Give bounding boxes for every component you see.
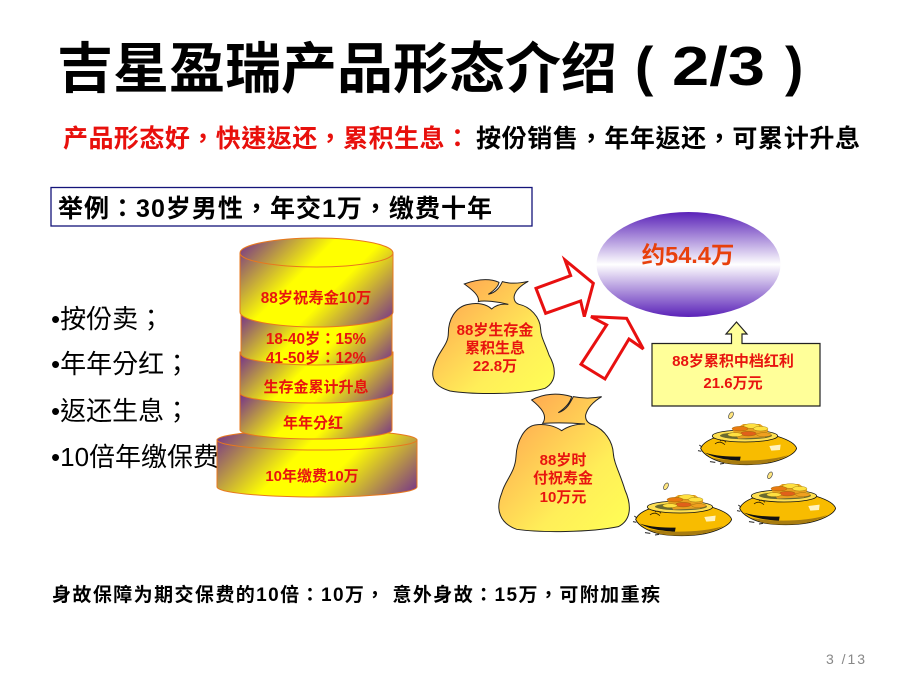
icon: gold pots (633, 411, 836, 536)
title: ) (785, 35, 803, 97)
arrow: upper red (536, 260, 593, 317)
bag: birthday benefit: 10万元 (540, 489, 586, 506)
dividend layer (240, 393, 392, 439)
rate layer: 41-50岁：12% (266, 349, 367, 367)
stacked cylinder chart (217, 238, 417, 497)
bullet list: •返还生息； (51, 396, 190, 426)
title: 吉星盈瑞产品形态介绍 (57, 38, 617, 100)
footnote: 身故保障为期交保费的10倍：10万， 意外身故：15万，可附加重疾 (52, 583, 660, 606)
example box (51, 188, 532, 226)
bullet list: •按份卖； (51, 304, 164, 334)
title: ( (635, 35, 654, 97)
cumulative interest layer (240, 352, 393, 403)
subtitle: 产品形态好，快速返还，累积生息： (63, 125, 470, 153)
dividend layer: 年年分红 (283, 414, 343, 432)
bag: survival benefit: 88岁生存金 (457, 321, 533, 339)
page number: 3 /13 (826, 651, 865, 667)
bag: survival benefit: 累积生息 (465, 339, 525, 357)
subtitle: 按份销售，年年返还，可累计升息 (476, 125, 860, 153)
base layer (217, 430, 417, 497)
bag: birthday benefit: 付祝寿金 (533, 469, 593, 487)
total oval: 约54.4万 (642, 242, 734, 268)
top layer (240, 238, 393, 327)
top layer: 88岁祝寿金10万 (261, 289, 371, 307)
bullet list: •10倍年缴保费 (51, 442, 219, 472)
rate layer (241, 312, 392, 367)
callout: accumulated dividend: 88岁累积中档红利 (672, 352, 794, 370)
example box: 举例：30岁男性，年交1万，缴费十年 (58, 195, 492, 223)
base layer: 10年缴费10万 (265, 467, 359, 485)
rate layer: 18-40岁：15% (266, 330, 367, 348)
bag: birthday benefit (499, 394, 629, 532)
total oval (596, 212, 780, 317)
subtitle (63, 125, 860, 153)
bullet list (51, 304, 219, 472)
callout: accumulated dividend (652, 322, 820, 406)
arrow: lower red (581, 317, 643, 379)
bullet list: •年年分红； (51, 349, 190, 379)
title: 2/3 (672, 35, 765, 97)
bag: birthday benefit: 88岁时 (540, 451, 586, 469)
bag: survival benefit: 22.8万 (473, 358, 517, 375)
callout: accumulated dividend: 21.6万元 (703, 375, 763, 392)
bag: survival benefit (433, 280, 554, 394)
cumulative interest layer: 生存金累计升息 (263, 378, 369, 396)
